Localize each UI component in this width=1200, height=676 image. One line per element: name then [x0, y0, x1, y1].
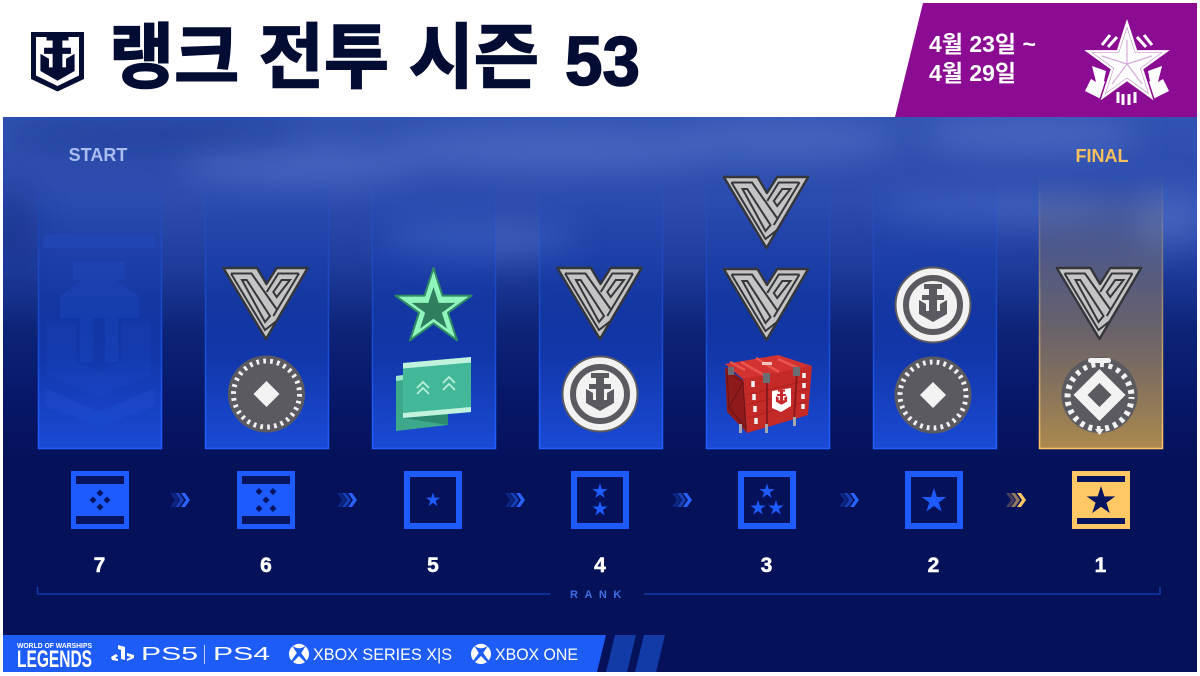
platform Xbox One: XBOX ONE	[495, 645, 578, 664]
game logo: LEGENDS	[17, 646, 92, 673]
arrow 7 to 6	[170, 493, 190, 507]
icon: anchor coin	[562, 356, 638, 432]
icon: rope coin	[228, 356, 305, 432]
arrow 5 to 4	[505, 493, 525, 507]
icon: laurel medal	[1062, 357, 1138, 435]
rank 7 icon	[71, 471, 129, 529]
platform Xbox Series: XBOX SERIES X|S	[313, 645, 452, 664]
icon: green star	[395, 268, 472, 340]
final label: FINAL	[1076, 146, 1128, 166]
icon: header shield logo	[31, 32, 84, 92]
footer stripes	[606, 635, 665, 672]
arrow 4 to 3	[672, 493, 692, 507]
rank 1 icon	[1072, 471, 1130, 529]
rank numbers: 5	[427, 554, 439, 577]
arrow 2 to 1	[1006, 493, 1026, 507]
game logo: WORLD OF WARSHIPS	[17, 641, 92, 650]
game logo	[17, 641, 92, 673]
rank axis	[38, 587, 1160, 601]
panel: rank 5	[372, 175, 496, 448]
platform Xbox One	[471, 644, 578, 664]
panel: rank 3	[706, 175, 830, 448]
header title: 53	[565, 22, 640, 100]
panel: rank 1 final	[1040, 175, 1162, 448]
panel: rank 7 start	[38, 175, 162, 448]
arrow 6 to 5	[337, 493, 357, 507]
icon: red crate	[725, 355, 812, 433]
header title: 랭크 전투 시즌	[109, 19, 539, 98]
arrow 3 to 2	[839, 493, 859, 507]
platform PlayStation: PS4	[213, 644, 270, 664]
panel: rank 4	[540, 175, 662, 448]
rank numbers: 2	[928, 554, 939, 577]
date text: 4월 29일	[929, 60, 1016, 86]
rank numbers: 7	[94, 554, 105, 577]
rank axis label: RANK	[570, 589, 628, 601]
start label: START	[69, 145, 127, 165]
platform PlayStation: PS5	[141, 644, 198, 664]
icon: green tickets	[396, 357, 471, 431]
rank 4 icon	[574, 474, 626, 526]
rank 5 icon	[407, 474, 459, 526]
icon: season star emblem	[1079, 14, 1175, 105]
rank 3 icon	[741, 474, 793, 526]
rank numbers	[94, 554, 1107, 577]
icon: silver chevron insignia	[557, 268, 642, 339]
platform PlayStation	[111, 644, 270, 664]
rank numbers: 3	[761, 554, 772, 577]
icon: anchor coin	[896, 268, 970, 342]
rank numbers: 6	[260, 554, 272, 577]
icon: silver chevron insignia	[1057, 268, 1141, 339]
footer platform bar	[3, 635, 665, 673]
icon: rope coin	[894, 356, 972, 434]
date text: 4월 23일 ~	[929, 31, 1036, 57]
rank 6 icon	[237, 471, 295, 529]
icon: silver chevron insignia top	[724, 177, 808, 248]
rank 2 icon	[908, 474, 960, 526]
panel: rank 6	[206, 175, 328, 448]
rank numbers: 4	[594, 554, 606, 577]
icon: silver chevron insignia	[223, 268, 308, 339]
rank numbers: 1	[1095, 554, 1107, 577]
panel: rank 2	[874, 175, 996, 448]
icon: watermark shield	[43, 235, 155, 426]
icon: silver chevron insignia bottom	[724, 269, 808, 340]
date banner	[895, 3, 1197, 117]
